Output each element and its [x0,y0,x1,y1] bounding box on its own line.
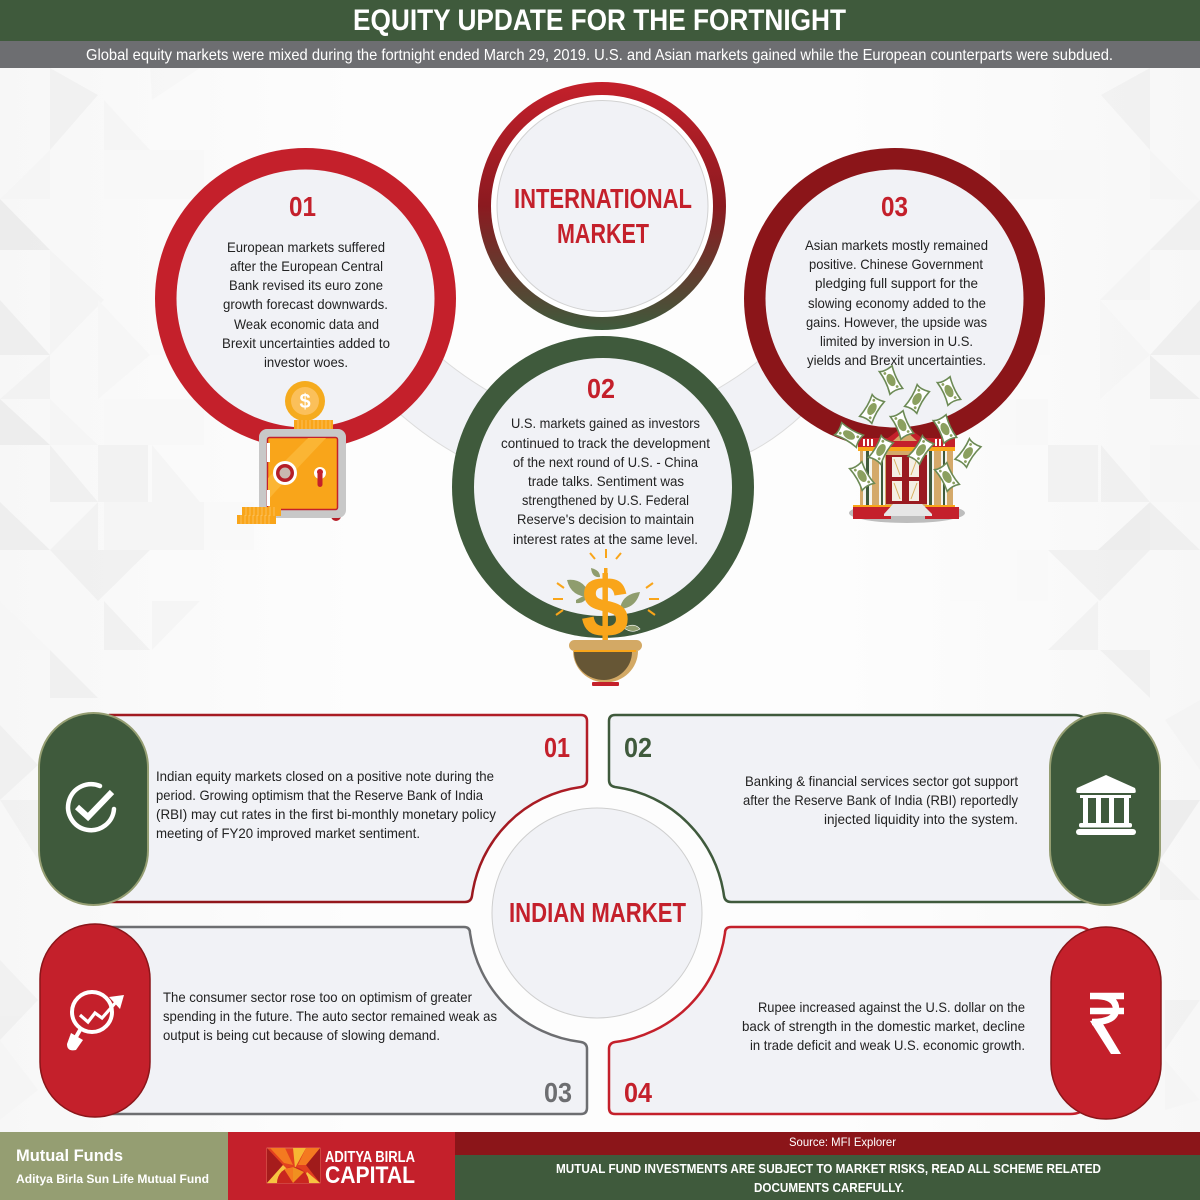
logo mark [267,1148,320,1183]
footer: mutual funds block: Mutual Funds [16,1146,123,1165]
text: Asia: limited by inversion in U.S. [820,333,973,349]
connector band: left circle to centre circle [400,357,495,456]
icon: dollar plant in pot: $ [582,560,628,654]
number 02: 02 [587,373,615,404]
subtitle bar [0,41,1200,68]
panel: international market heading circle: INTERNATIONAL [514,183,692,214]
icon: safe with coins: $ [299,391,311,413]
footer: logo block: CAPITAL [325,1162,415,1189]
panel: international 03 Asia [744,148,1045,523]
text: U.S.: U.S. markets gained as investors [511,415,700,431]
panel: international market heading circle [478,82,726,330]
text: consumer sector: output is being cut because of slowing demand. [163,1027,440,1043]
footer: mutual funds block [0,1132,228,1200]
panel: indian 03 [110,927,587,1114]
footer: mutual funds block: Aditya Birla Sun Life Mutual Fund [16,1172,209,1186]
subtitle bar: Global equity markets were mixed during the fortnight ended March 29, 2019. U.S. and Asian markets gained while the European counterparts were subdued. [86,47,1113,64]
text: consumer sector [163,989,497,1043]
footer: logo block [228,1132,455,1200]
footer: disclaimer [455,1155,1200,1200]
footer: disclaimer: MUTUAL FUND INVESTMENTS ARE SUBJECT TO MARKET RISKS, READ ALL SCHEME RELATED [556,1161,1101,1176]
text: Asia: Asian markets mostly remained [805,237,988,253]
text: U.S.: Reserve's decision to maintain [517,511,694,527]
icon: bank with flying banknotes [835,366,981,523]
text: Europe: European markets suffered [227,239,385,255]
panel: international 01 Europe [155,148,456,524]
text: Asia [805,237,988,368]
icon pill: magnifier with trend [40,924,150,1117]
text: Europe: Weak economic data and [234,316,379,332]
text: U.S. [501,415,710,547]
panel: international 02 U.S. [452,336,754,686]
number 01: 01 [289,191,316,222]
icon pill: rupee symbol [1051,927,1161,1119]
text: market close: Indian equity markets closed on a positive note during the [156,768,494,784]
text: U.S.: strengthened by U.S. Federal [522,492,689,508]
text: Europe: investor woes. [264,354,348,370]
text: rupee: in trade deficit and weak U.S. economic growth. [750,1037,1025,1053]
icon pill: bank building [1050,713,1160,905]
text: banking: after the Reserve Bank of India (RBI) reportedly [743,792,1018,808]
text: Europe: Bank revised its euro zone [229,277,383,293]
footer: source strip [455,1132,1200,1155]
text: Asia: positive. Chinese Government [809,256,983,272]
title bar [0,0,1200,41]
text: Asia: slowing economy added to the [808,295,986,311]
number 04: 04 [624,1077,652,1108]
text: banking [743,773,1018,827]
panel: indian 02 [609,715,1095,902]
text: market close: (RBI) may cut rates in the first bi-monthly monetary policy [156,806,496,822]
indian market centre circle [492,808,702,1018]
text: banking: Banking & financial services sector got support [745,773,1018,789]
number 03: 03 [544,1077,572,1108]
text: Asia: yields and Brexit uncertainties. [807,352,986,368]
text: rupee: back of strength in the domestic market, decline [742,1018,1025,1034]
icon: dollar plant in pot [553,549,659,686]
text: rupee [742,999,1025,1053]
text: market close [156,768,496,841]
text: Asia: pledging full support for the [815,275,978,291]
number 01: 01 [544,732,570,763]
text: consumer sector: The consumer sector rose too on optimism of greater [163,989,472,1005]
text: Europe: growth forecast downwards. [223,296,388,312]
connector band: right circle to centre circle [712,358,803,453]
text: Europe: after the European Central [230,258,383,274]
title bar: EQUITY UPDATE FOR THE FORTNIGHT [353,4,846,37]
icon pill: check mark [39,713,148,905]
text: rupee: Rupee increased against the U.S. dollar on the [758,999,1025,1015]
text: market close: meeting of FY20 improved market sentiment. [156,825,420,841]
text: Europe [222,239,390,370]
text: U.S.: interest rates at the same level. [513,531,698,547]
footer: source strip: Source: MFI Explorer [789,1135,896,1149]
panel: international market heading circle: MARKET [557,218,649,249]
indian market centre circle: INDIAN MARKET [509,897,686,928]
text: Europe: Brexit uncertainties added to [222,335,390,351]
text: U.S.: continued to track the development [501,435,710,451]
text: consumer sector: spending in the future. The auto sector remained weak as [163,1008,497,1024]
footer: logo block: ADITYA BIRLA [325,1149,415,1166]
icon: safe with coins [237,381,346,524]
text: banking: injected liquidity into the system. [824,811,1018,827]
panel: indian 04 [609,927,1095,1114]
number 02: 02 [624,732,652,763]
panel: indian 01 [110,715,587,902]
text: market close: period. Growing optimism that the Reserve Bank of India [156,787,483,803]
footer: disclaimer: DOCUMENTS CAREFULLY. [754,1180,904,1195]
number 03: 03 [881,191,908,222]
text: U.S.: trade talks. Sentiment was [528,473,684,489]
text: U.S.: of the next round of U.S. - China [513,454,698,470]
text: Asia: gains. However, the upside was [806,314,987,330]
